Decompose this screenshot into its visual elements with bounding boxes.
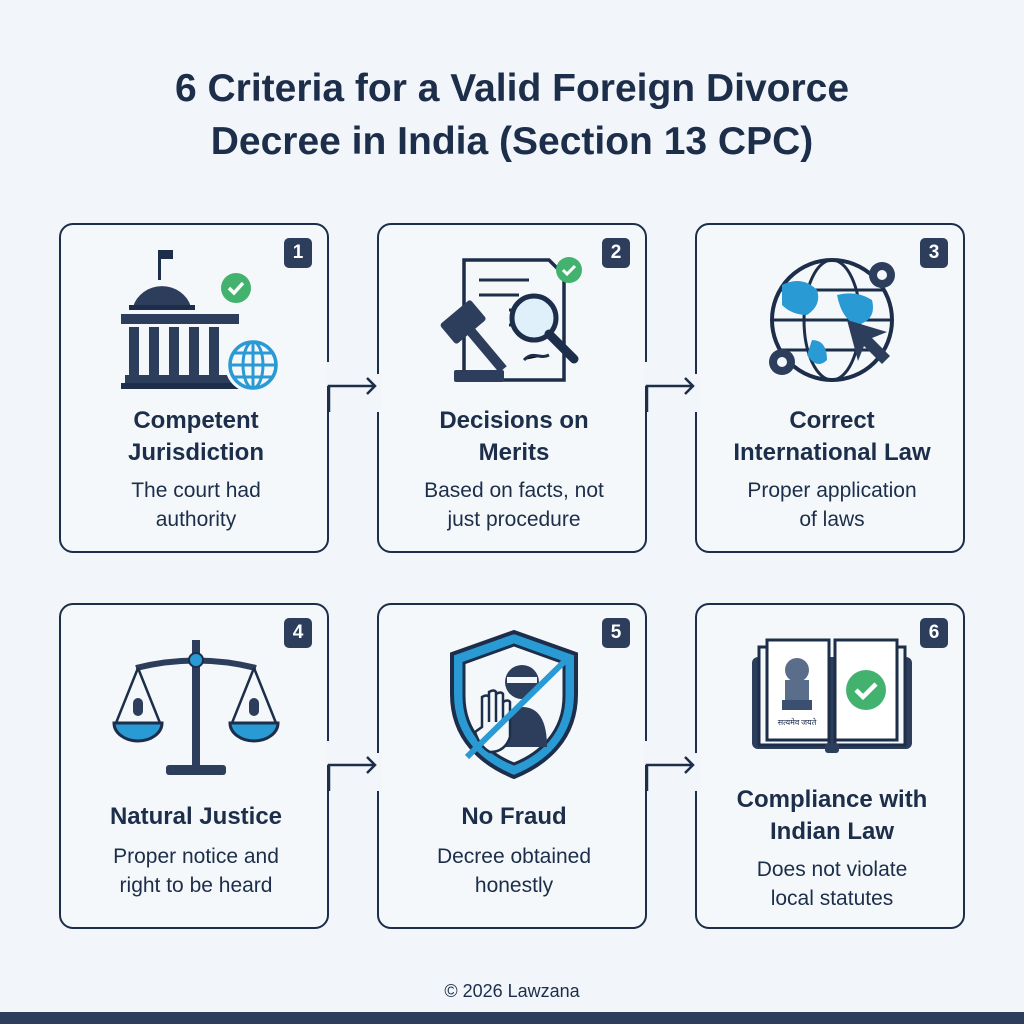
badge 1: 1 [293,242,303,263]
panel: 6 compliance with indian law: Compliance with [737,786,927,813]
panel: 6 compliance with indian law: local statutes [771,887,893,910]
panel: 5 no fraud: honestly [475,874,553,897]
panel: 3 correct international law: Correct [789,407,875,434]
arrow: 2 to 3 [645,362,697,412]
panel: 5 no fraud: No Fraud [461,803,567,830]
panel: 3 correct international law: International Law [733,439,931,466]
panel: 3 correct international law: Proper application [747,479,917,502]
panel: 6 compliance with indian law [695,603,965,929]
heading: Competent [133,407,259,434]
panel: 6 compliance with indian law: Does not violate [757,858,907,881]
title: Decree in India (Section 13 CPC) [211,120,813,163]
panel: 5 no fraud [377,603,647,929]
panel: 2 decisions on merits: just procedure [447,508,581,531]
icon: gavel and document [440,257,582,382]
icon: open book with emblem and check [752,638,912,753]
panel: 3 correct international law: 3 [929,242,939,263]
icon: courthouse with globe [121,250,278,390]
icon: globe with gears and cursor [769,258,895,382]
title [175,67,849,163]
panel: 6 compliance with indian law: Indian Law [770,818,894,845]
arrow: 4 to 5 [327,741,379,791]
footer: © 2026 Lawzana [444,981,580,1001]
panel: 6 compliance with indian law: 6 [929,622,939,643]
panel: 4 natural justice [59,603,329,929]
panel: 4 natural justice: right to be heard [120,874,272,897]
panel: 2 decisions on merits: 2 [611,242,621,263]
panel: 4 natural justice: Natural Justice [110,803,282,830]
panel: 5 no fraud: 5 [611,622,621,643]
heading: Jurisdiction [128,439,264,466]
panel: 3 correct international law: of laws [799,508,865,531]
panel: 2 decisions on merits [377,223,647,553]
panel: 3 correct international law [695,223,965,553]
panel: 4 natural justice: 4 [293,622,303,643]
title: 6 Criteria for a Valid Foreign Divorce [175,67,849,110]
icon: open book with emblem and check: सत्यमेव जयते [778,717,817,728]
description [131,479,261,531]
panel: 5 no fraud: Decree obtained [437,845,591,868]
arrow: 5 to 6 [645,741,697,791]
description: The court had [131,479,261,502]
heading [128,407,264,466]
arrow: 1 to 2 [327,362,379,412]
badge 1 [284,238,312,268]
panel: 2 decisions on merits: Merits [479,439,549,466]
icon: scales of justice [112,640,280,775]
panel: 1 competent jurisdiction [59,223,329,553]
description: authority [156,508,236,531]
panel: 2 decisions on merits: Based on facts, not [424,479,604,502]
icon: shield with blocked thief [450,630,578,780]
panel: 4 natural justice: Proper notice and [113,845,279,868]
bottom bar [0,1012,1024,1024]
panel: 2 decisions on merits: Decisions on [439,407,589,434]
